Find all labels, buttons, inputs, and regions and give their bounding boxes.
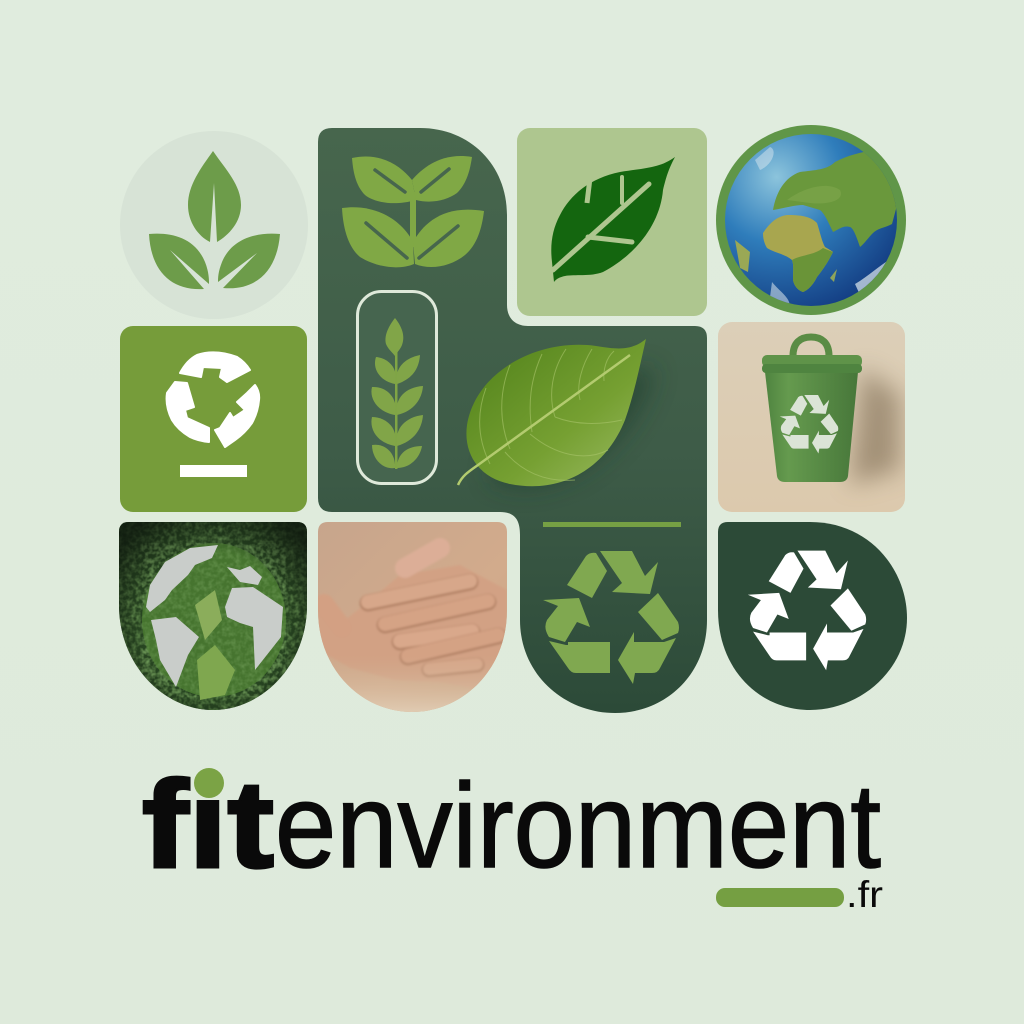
icon: recycle symbol on bin xyxy=(780,395,838,453)
icon: earth globe xyxy=(716,125,906,315)
icon: white recycle symbol xyxy=(748,551,866,670)
panel: clasped hands photo xyxy=(318,522,507,712)
panel: green recycling tile xyxy=(120,326,307,512)
icon: three leaf sprout xyxy=(149,151,280,289)
panel: beige bin tile xyxy=(718,322,905,512)
logo green bar xyxy=(716,888,844,907)
icon: green recycle symbol xyxy=(543,551,679,684)
icon: dark green leaf xyxy=(551,157,675,282)
icon: pill frame with fern xyxy=(358,292,436,484)
panel: light green leaf tile xyxy=(517,128,707,316)
decoration bar: white xyxy=(180,465,247,477)
icon: realistic large leaf xyxy=(458,339,655,487)
icon: green recycling bin xyxy=(762,337,862,482)
panel: dark green central shape xyxy=(318,128,707,713)
logo green i dot xyxy=(194,768,224,798)
logo wordmark: fit xyxy=(142,756,274,894)
icon: white circular recycle arrows xyxy=(167,352,259,447)
icon: sprout with four leaves xyxy=(342,156,484,267)
panel: mossy globe photo xyxy=(119,522,307,710)
logo wordmark: environment xyxy=(275,759,881,893)
logo domain suffix: .fr xyxy=(846,874,883,915)
decoration bar: green on recycle panel xyxy=(543,522,681,527)
globe land shapes xyxy=(146,545,283,687)
panel: dark recycle tile xyxy=(718,522,907,710)
panel: plant icon circle xyxy=(120,131,308,319)
